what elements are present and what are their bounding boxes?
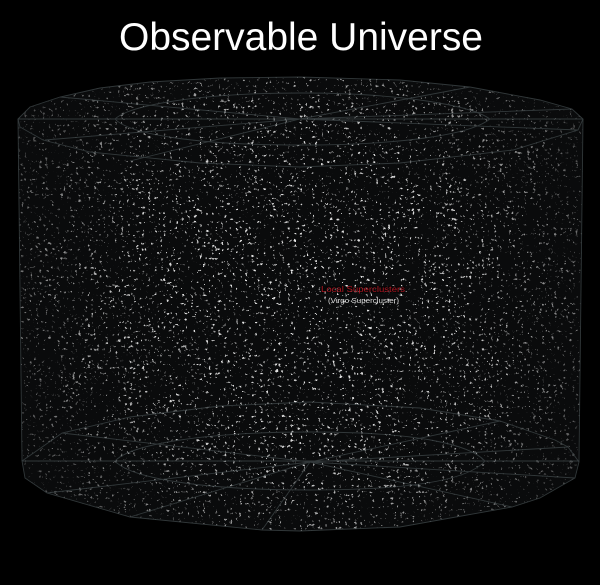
label: Virgo Supercluster: (Virgo Supercluster) [328,296,400,305]
galaxy field [18,77,583,530]
top disc wireframe [18,77,583,167]
bottom disc wireframe [22,402,579,531]
label: Local Superclusters: Local Superclusters [321,285,405,294]
title: Observable Universe [119,16,483,59]
cylinder side walls [18,119,583,462]
cylinder body [18,77,583,531]
